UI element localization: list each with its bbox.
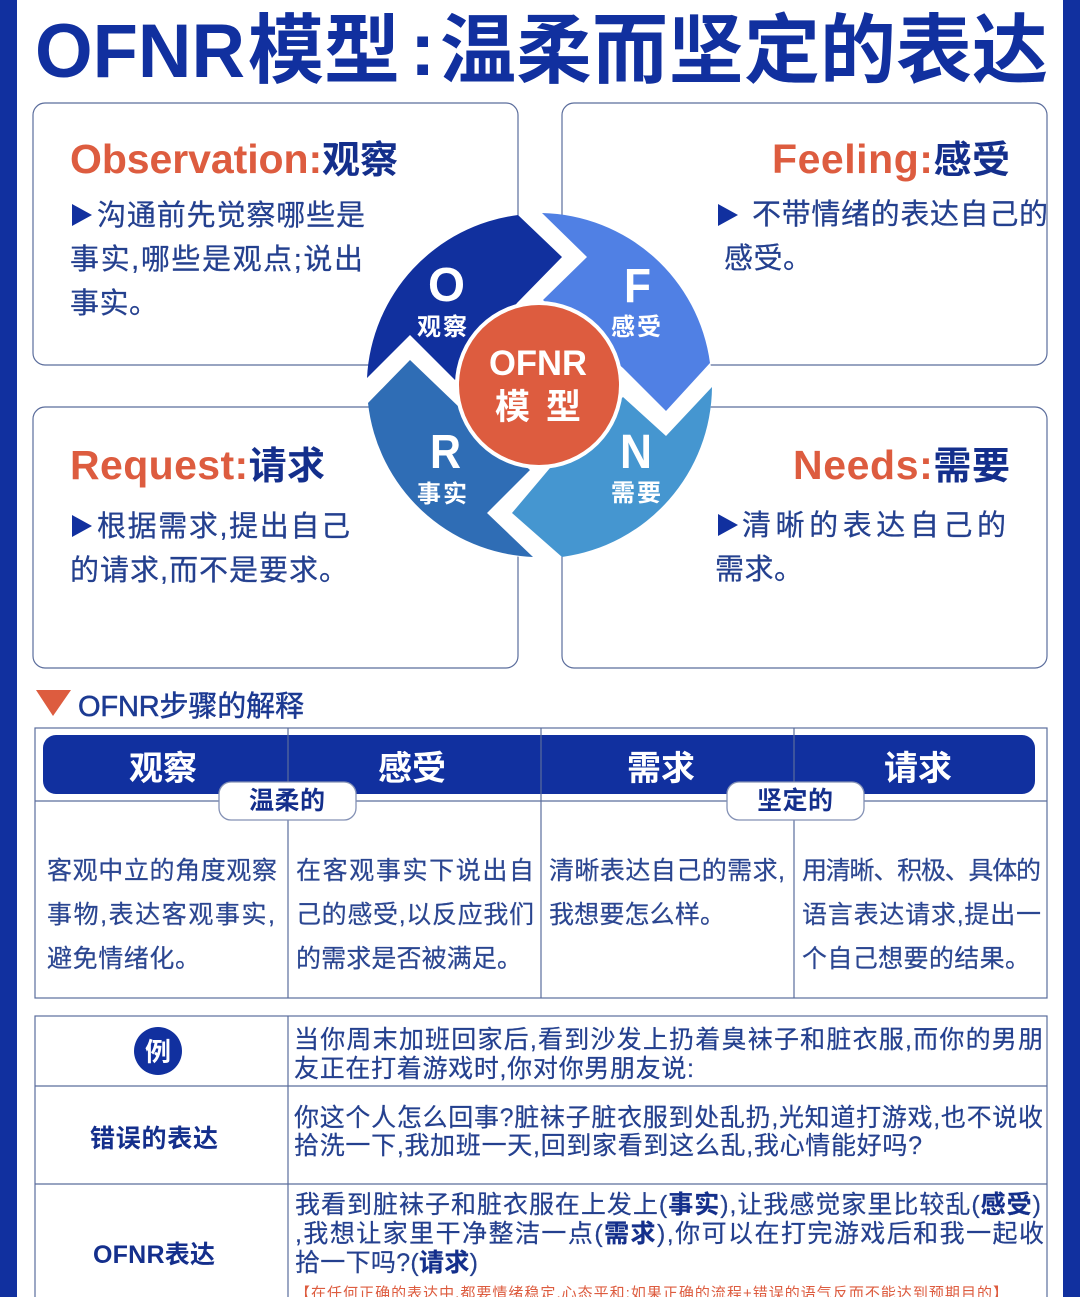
- section heading: OFNR steps: OFNR步骤的解释: [78, 690, 304, 723]
- segment: R request: R: [430, 426, 461, 479]
- badge: example: [134, 1027, 182, 1075]
- heading: needs: Needs:需要: [793, 442, 1010, 488]
- segment: O observation: 观察: [417, 314, 467, 341]
- icon: bullet arrow: [718, 514, 738, 536]
- column heading: observation: 观察: [129, 750, 197, 788]
- text: feeling description: [724, 198, 1048, 275]
- text: feeling column: [296, 857, 534, 973]
- text: feeling column: 在客观事实下说出自: [296, 857, 534, 885]
- center circle: OFNR: [489, 344, 587, 383]
- OFNR wheel diagram: [367, 213, 712, 558]
- text: needs column: [549, 857, 785, 929]
- table: OFNR steps explanation: [35, 728, 1047, 998]
- text: wrong expression: 拾洗一下,我加班一天,回到家看到这么乱,我心情能好吗?: [294, 1132, 922, 1160]
- text: request column: 语言表达请求,提出一: [802, 901, 1041, 929]
- center circle: 模 型: [495, 388, 581, 427]
- wheel white backing: [368, 214, 712, 558]
- text: observation column: 客观中立的角度观察: [47, 857, 277, 885]
- segment: N needs: N: [620, 426, 652, 479]
- column heading: request: 请求: [884, 750, 952, 788]
- table: example: [35, 1016, 1047, 1297]
- text: needs description: [715, 509, 1006, 586]
- title: 模型: [248, 9, 400, 94]
- text: needs column: 我想要怎么样。: [549, 901, 725, 929]
- text: observation description: 事实,哪些是观点;说出: [70, 243, 363, 276]
- segment: F feeling: F: [624, 260, 651, 313]
- text: OFNR expression: 拾一下吗?(请求): [295, 1249, 478, 1277]
- text: observation column: 避免情绪化。: [47, 945, 200, 973]
- right side bar: [1063, 0, 1080, 1297]
- text: observation description: 沟通前先觉察哪些是: [97, 199, 365, 232]
- segment: R request: [368, 360, 533, 557]
- text: request column: 用清晰、积极、具体的: [802, 857, 1041, 885]
- panel: needs: [562, 407, 1047, 668]
- text: observation description: [70, 199, 365, 320]
- text: request column: [802, 857, 1041, 973]
- panel: request: [33, 407, 518, 668]
- text: observation column: 事物,表达客观事实,: [47, 901, 275, 929]
- text: feeling description: 不带情绪的表达自己的: [752, 198, 1048, 231]
- text: OFNR expression: 我看到脏袜子和脏衣服在上发上(事实),让我感觉家里比较乱(感受): [295, 1190, 1041, 1219]
- text: example scenario: 当你周末加班回家后,看到沙发上扔着臭袜子和脏衣服,而你的男朋: [294, 1026, 1043, 1054]
- segment: N needs: [512, 387, 712, 557]
- text: observation description: 事实。: [70, 287, 158, 320]
- column heading: needs: 需求: [627, 750, 695, 788]
- text: needs column: 清晰表达自己的需求,: [549, 857, 785, 885]
- heading: observation: Observation:观察: [70, 136, 398, 182]
- text: request description: 根据需求,提出自己: [97, 510, 350, 543]
- icon: bullet arrow: [718, 204, 738, 226]
- icon: heading triangle: [36, 690, 71, 716]
- pill: gentle: 温柔的: [249, 787, 325, 815]
- title: 温柔而坚定的表达: [440, 9, 1048, 94]
- panel: observation: [33, 103, 518, 365]
- segment: F feeling: 感受: [611, 313, 661, 341]
- text: needs description: 清晰的表达自己的: [742, 509, 1006, 542]
- text: needs description: 需求。: [715, 553, 803, 586]
- left side bar: [0, 0, 17, 1297]
- segment: N needs: 需要: [611, 480, 661, 507]
- segment: F feeling: [542, 213, 710, 411]
- icon: bullet arrow: [72, 515, 92, 537]
- heading: feeling: Feeling:感受: [772, 136, 1010, 182]
- text: example scenario: [294, 1026, 1043, 1083]
- text: wrong expression: [294, 1104, 1043, 1160]
- pill: firm: [727, 782, 864, 820]
- label: OFNR expression: OFNR表达: [93, 1241, 215, 1269]
- text: wrong expression: 你这个人怎么回事?脏袜子脏衣服到处乱扔,光知道打游戏,也不说收: [294, 1104, 1043, 1132]
- header band: [43, 735, 1035, 794]
- text: request description: [70, 510, 350, 587]
- badge: example: 例: [145, 1037, 171, 1067]
- text: feeling description: 感受。: [724, 242, 812, 275]
- text: request column: 个自己想要的结果。: [802, 945, 1030, 973]
- text: example scenario: 友正在打着游戏时,你对你男朋友说:: [294, 1055, 694, 1083]
- title: OFNR: [35, 9, 245, 94]
- segment: O observation: O: [428, 259, 465, 312]
- text: OFNR expression: ,我想让家里干净整洁一点(需求),你可以在打完游戏后和我一起收: [295, 1220, 1044, 1248]
- panel: feeling: [562, 103, 1048, 365]
- icon: bullet arrow: [72, 204, 92, 226]
- text: observation column: [47, 857, 277, 973]
- label: wrong expression: 错误的表达: [90, 1125, 218, 1153]
- segment: O observation: [367, 215, 562, 380]
- title: [35, 7, 1048, 94]
- pill: gentle: [219, 782, 356, 820]
- pill: firm: 坚定的: [757, 787, 833, 815]
- text: feeling column: 己的感受,以反应我们: [296, 901, 534, 929]
- text: feeling column: 的需求是否被满足。: [296, 945, 522, 973]
- text: OFNR expression: [295, 1190, 1044, 1277]
- title: :: [410, 7, 435, 92]
- segment: R request: 事实: [417, 481, 467, 508]
- heading: request: Request:请求: [70, 442, 325, 488]
- column heading: feeling: 感受: [378, 750, 446, 788]
- text: request description: 的请求,而不是要求。: [70, 554, 348, 587]
- center circle: [455, 301, 623, 469]
